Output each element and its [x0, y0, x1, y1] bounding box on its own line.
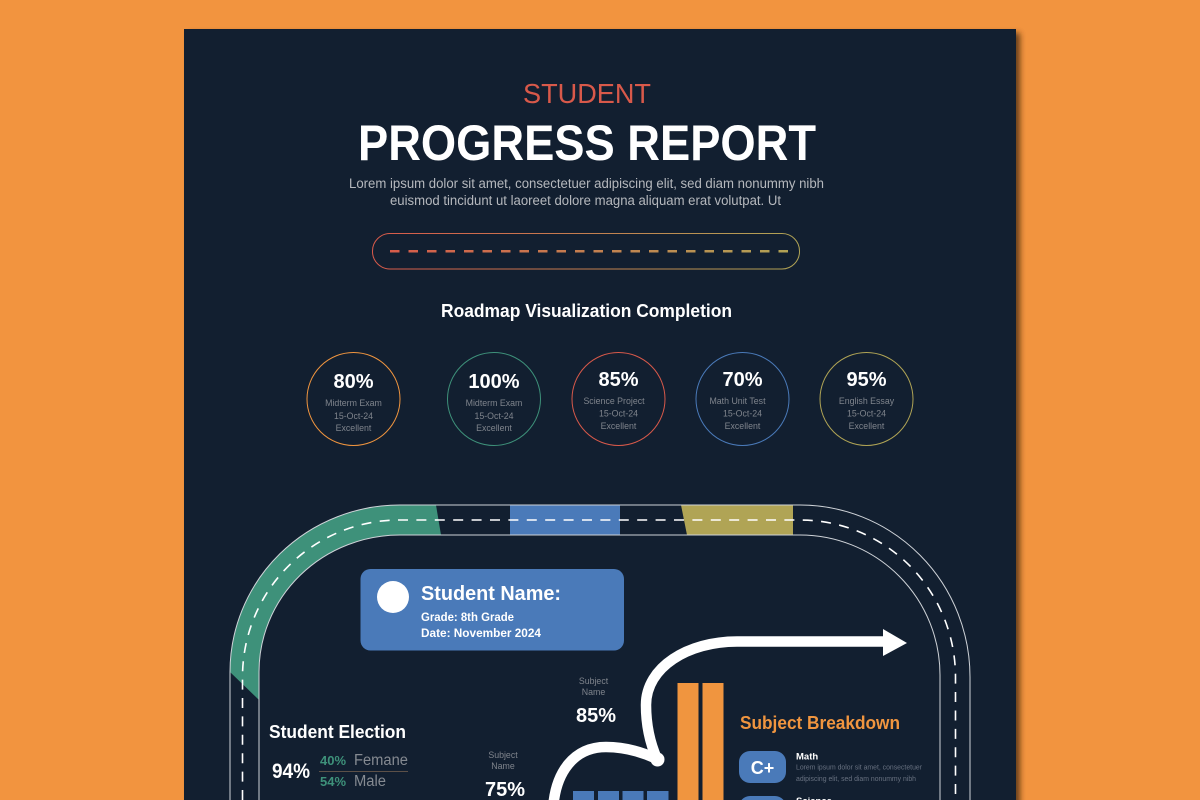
- student card: Date: November 2024: [421, 626, 541, 640]
- heading: student: STUDENT: [523, 78, 651, 109]
- icon: avatar: [377, 581, 409, 613]
- milestone: english essay: English Essay: [839, 396, 895, 406]
- subject breakdown: adipiscing elit, sed diam nonummy nibh: [796, 776, 916, 783]
- student election: 54%: [320, 774, 346, 789]
- grade badge: science: [739, 796, 786, 800]
- progress pill with dashed line: [372, 234, 800, 269]
- student election: Male: [354, 773, 386, 790]
- milestone: midterm exam 80: 15-Oct-24: [334, 411, 373, 421]
- subject breakdown: Lorem ipsum dolor sit amet, consectetuer: [796, 764, 923, 772]
- milestone: math unit test: 70%: [722, 369, 763, 391]
- student card: Grade: 8th Grade: [421, 610, 514, 624]
- student election: [269, 722, 408, 790]
- milestone: midterm exam 100: Midterm Exam: [466, 398, 522, 408]
- track edge: inner: [259, 535, 940, 800]
- title: progress report: PROGRESS REPORT: [358, 115, 816, 171]
- heading: roadmap: Roadmap Visualization Completion: [441, 301, 732, 321]
- bar chart: [573, 683, 724, 800]
- roadmap track: [230, 505, 970, 800]
- milestone: math unit test: 15-Oct-24: [723, 408, 762, 418]
- subject stat 85: Name: [582, 687, 605, 697]
- milestone: midterm exam 100: 15-Oct-24: [474, 411, 514, 421]
- student election: 94%: [272, 760, 310, 783]
- subject stat 75: Name: [491, 761, 515, 771]
- track segment: yellow: [681, 505, 793, 535]
- milestone: science project: [572, 352, 665, 446]
- poster panel: [184, 29, 1016, 800]
- student card: [360, 569, 624, 650]
- grade badge: math: [739, 751, 786, 783]
- subject breakdown: Math: [796, 752, 818, 762]
- intro text: euismod tincidunt ut laoreet dolore magna aliquam erat volutpat. Ut: [390, 193, 781, 208]
- subject stat 85: Subject: [579, 676, 609, 686]
- milestone: math unit test: Math Unit Test: [709, 396, 766, 406]
- student election: Student Election: [269, 722, 406, 742]
- milestone: english essay: 15-Oct-24: [847, 408, 886, 418]
- milestone: midterm exam 80: Excellent: [336, 423, 372, 433]
- subject stat 85: [576, 676, 616, 727]
- milestone: english essay: [820, 352, 913, 446]
- track segment: green: [230, 505, 441, 700]
- milestone: midterm exam 100: [448, 352, 540, 446]
- milestone: science project: Excellent: [601, 421, 637, 431]
- track segment: blue: [510, 505, 620, 535]
- student election: Femane: [354, 752, 408, 769]
- milestone: english essay: Excellent: [849, 421, 885, 431]
- track edge: outer: [230, 505, 970, 800]
- subject stat 75: [485, 750, 525, 800]
- track centre dashes: [242, 520, 955, 800]
- milestone: science project: Science Project: [583, 396, 645, 406]
- student election: 40%: [320, 753, 346, 768]
- intro text: Lorem ipsum dolor sit amet, consectetuer adipiscing elit, sed diam nonummy nibh: [349, 176, 824, 191]
- milestone: science project: 85%: [598, 369, 639, 391]
- subject breakdown: C+: [751, 758, 774, 778]
- intro text: [349, 176, 824, 208]
- subject stat 85: 85%: [576, 705, 616, 727]
- student card: Student Name:: [421, 583, 561, 605]
- arrow: growth curve: [553, 629, 907, 800]
- milestone: science project: 15-Oct-24: [599, 408, 638, 418]
- subject breakdown: [739, 712, 923, 800]
- milestone: midterm exam 100: Excellent: [476, 423, 512, 433]
- milestone: math unit test: [696, 352, 789, 446]
- milestone: midterm exam 80: 80%: [333, 371, 374, 393]
- subject stat 75: Subject: [488, 750, 518, 760]
- milestone: english essay: 95%: [846, 369, 887, 391]
- subject breakdown: Subject Breakdown: [740, 712, 900, 733]
- milestone: math unit test: Excellent: [725, 421, 761, 431]
- milestone: midterm exam 80: Midterm Exam: [325, 398, 382, 408]
- milestone: midterm exam 80: [307, 352, 400, 446]
- milestone: midterm exam 100: 100%: [468, 371, 520, 393]
